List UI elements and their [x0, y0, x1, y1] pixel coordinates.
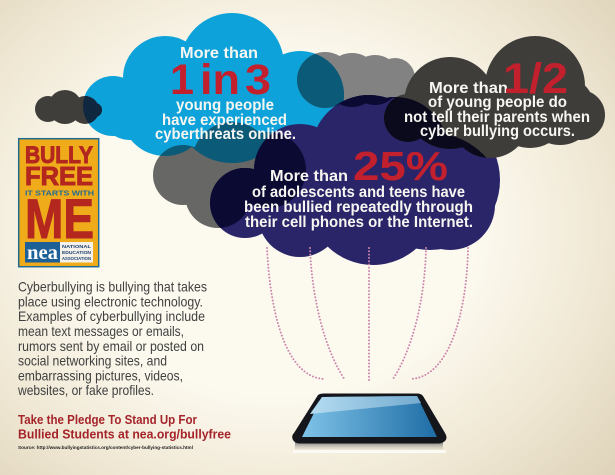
dotted signal lines	[267, 248, 468, 380]
badge tagline: IT STARTS WITH	[25, 188, 94, 198]
call to action: Take the Pledge To Stand Up For	[18, 412, 197, 427]
stat: 25%: been bullied repeatedly through	[244, 199, 473, 216]
stat: 1/2: of young people do	[428, 94, 567, 111]
navy overlaps with grey clouds	[210, 95, 396, 228]
navy cloud	[210, 95, 500, 265]
tablet shadow	[295, 442, 443, 450]
description text: mean text messages or emails,	[18, 324, 184, 339]
description text: embarrassing pictures, videos,	[18, 368, 183, 383]
stat: 1/2: 1/2	[503, 55, 568, 103]
badge title: BULLY	[25, 142, 93, 169]
screen glare	[310, 396, 421, 414]
badge: Bully Free	[19, 139, 99, 267]
description text: social networking sites, and	[18, 354, 167, 368]
grey cloud upper right	[297, 52, 415, 108]
NEA logo	[25, 242, 93, 264]
small dark cloud	[35, 90, 102, 124]
big number 1 in 3: in	[200, 56, 240, 104]
stat: 25%: of adolescents and teens have	[252, 184, 465, 201]
stat: 1 in 3: young people	[176, 97, 274, 114]
stat: 1 in 3: have experienced	[162, 112, 287, 129]
stat: 1 in 3: cyberthreats online.	[155, 126, 296, 143]
tablet screen	[302, 396, 437, 437]
grey cloud lower left	[153, 122, 306, 228]
description text: place using electronic technology.	[18, 294, 203, 310]
tablet	[292, 394, 446, 453]
stat: 1 in 3: More than	[180, 45, 258, 62]
stat: 1 in 3	[155, 45, 296, 143]
blue cloud	[83, 13, 344, 163]
NEA logo: NATIONAL	[62, 244, 91, 249]
dark grey cloud	[384, 36, 605, 158]
description text: rumors sent by email or posted on	[18, 339, 204, 354]
stat: 25%: More than	[270, 168, 348, 185]
call to action	[18, 412, 231, 442]
big number 1 in 3	[170, 56, 271, 104]
stat: 1/2: not tell their parents when	[404, 109, 590, 126]
big number 1 in 3: 3	[245, 56, 271, 104]
description text: websites, or fake profiles.	[17, 383, 154, 398]
big number 1 in 3: 1	[170, 56, 194, 104]
stat: 25%: their cell phones or the Internet.	[245, 214, 473, 231]
stat: 25%	[244, 143, 473, 231]
badge title: ME	[25, 187, 94, 250]
NEA logo: nea	[27, 242, 58, 264]
dark cloud overlap with navy	[384, 97, 486, 158]
stat: 1/2: More than	[429, 80, 508, 97]
description text: Examples of cyberbullying include	[18, 309, 205, 324]
tablet body	[292, 394, 446, 444]
description text	[17, 280, 207, 398]
badge title: FREE	[25, 161, 93, 191]
NEA logo: EDUCATION	[62, 250, 92, 255]
badge title	[25, 142, 94, 250]
small cloud overlap	[83, 96, 102, 124]
call to action: Bullied Students at nea.org/bullyfree	[18, 426, 231, 442]
stat: 1/2	[404, 55, 590, 140]
stat: 1/2: cyber bullying occurs.	[420, 123, 575, 140]
teal overlaps	[160, 54, 344, 163]
NEA logo: ASSOCIATION	[62, 256, 92, 261]
source line: Source: http://www.bullyingstatistics.org/content/cyber-bullying-statistics.html	[18, 445, 193, 450]
description text: Cyberbullying is bullying that takes	[18, 280, 207, 295]
stat: 25%: 25%	[353, 143, 448, 189]
